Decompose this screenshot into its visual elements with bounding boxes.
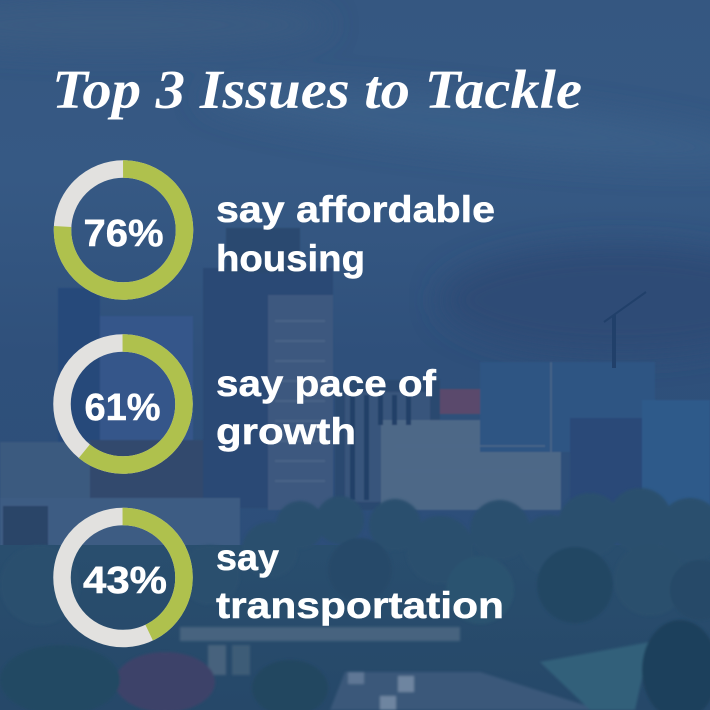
donut chart: 76% (62, 169, 184, 291)
label: growth (216, 411, 356, 452)
stat: 76% affordable housing (62, 169, 495, 291)
background: crane (604, 292, 646, 368)
stat: 43% transportation (62, 516, 504, 638)
background: trees and road (0, 488, 710, 710)
donut chart: 61%: 61% (84, 387, 160, 429)
donut chart: 43%: 43% (83, 560, 167, 602)
label: transportation (216, 585, 504, 626)
label: housing (216, 238, 365, 279)
label: say affordable (216, 189, 495, 230)
donut chart: 61% (62, 343, 184, 465)
label: say (216, 537, 279, 578)
background: city skyline (0, 228, 710, 548)
label: say pace of (216, 363, 437, 404)
donut chart: 76%: 76% (84, 213, 164, 255)
donut chart: 43% (62, 516, 184, 638)
title: Top 3 Issues to Tackle (52, 59, 582, 120)
stat: 61% pace of growth (62, 343, 437, 465)
